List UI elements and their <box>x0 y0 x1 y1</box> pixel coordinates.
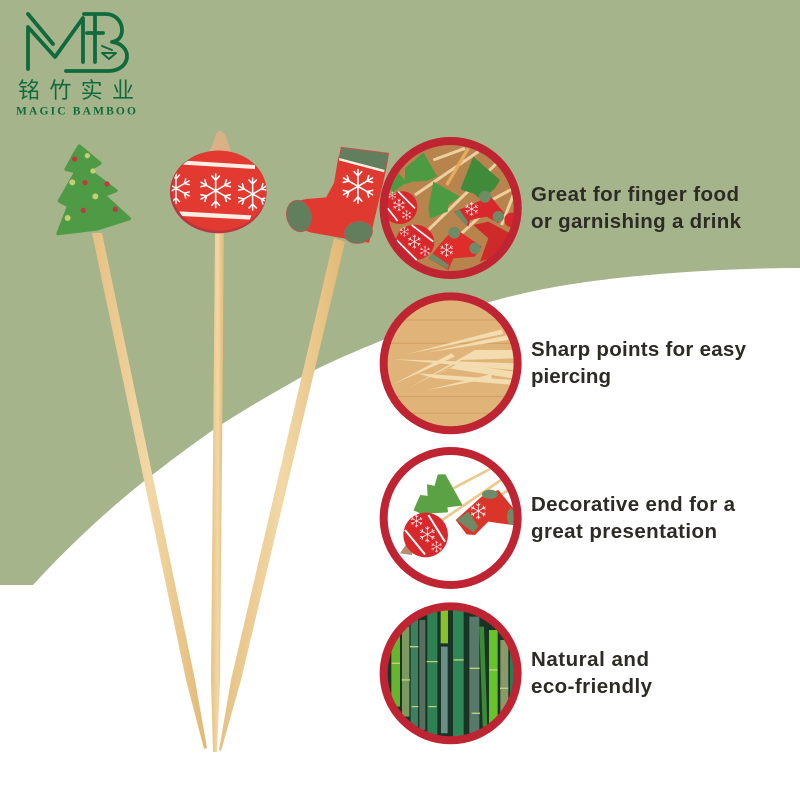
topper: round ornament <box>161 131 268 233</box>
tree centre <box>428 182 460 218</box>
pick stick: ornament <box>211 232 224 752</box>
caption: eco-friendly <box>531 675 653 698</box>
pick stick: stocking <box>219 238 345 751</box>
bamboo picks with decorative toppers <box>58 131 389 752</box>
caption: or garnishing a drink <box>531 210 742 233</box>
caption: Great for finger food <box>531 183 739 206</box>
caption: great presentation <box>531 520 717 543</box>
caption <box>531 183 742 233</box>
tree <box>414 475 462 513</box>
caption <box>531 493 736 543</box>
feature 3: decorative end <box>380 447 736 589</box>
ornament <box>400 543 413 555</box>
caption: Natural and <box>531 648 649 671</box>
caption: Decorative end for a <box>531 493 736 516</box>
pick stick: tree <box>92 233 207 749</box>
caption <box>531 338 747 388</box>
stocking <box>456 490 513 535</box>
caption: Sharp points for easy <box>531 338 747 361</box>
feature 4: natural bamboo <box>380 603 653 744</box>
tree right <box>461 157 500 200</box>
logo: Magic Bamboo <box>16 14 136 118</box>
topper: stocking <box>283 147 389 246</box>
tree left <box>390 152 437 192</box>
logo mark <box>28 14 127 71</box>
photo circle: sharp sticks on bamboo board <box>380 293 522 434</box>
caption: piercing <box>531 365 611 388</box>
photo circle: bamboo grove <box>380 603 522 744</box>
topper: Christmas tree <box>58 146 129 234</box>
logo Chinese name: 铭竹实业 <box>18 78 134 103</box>
logo English name: MAGIC BAMBOO <box>16 106 136 118</box>
photo circle: assorted picks on wood <box>380 137 522 279</box>
feature 2: sharp points <box>380 293 747 434</box>
photo circle: three toppers on white <box>380 447 522 589</box>
feature 1: finger food <box>380 137 742 279</box>
caption <box>531 648 653 698</box>
